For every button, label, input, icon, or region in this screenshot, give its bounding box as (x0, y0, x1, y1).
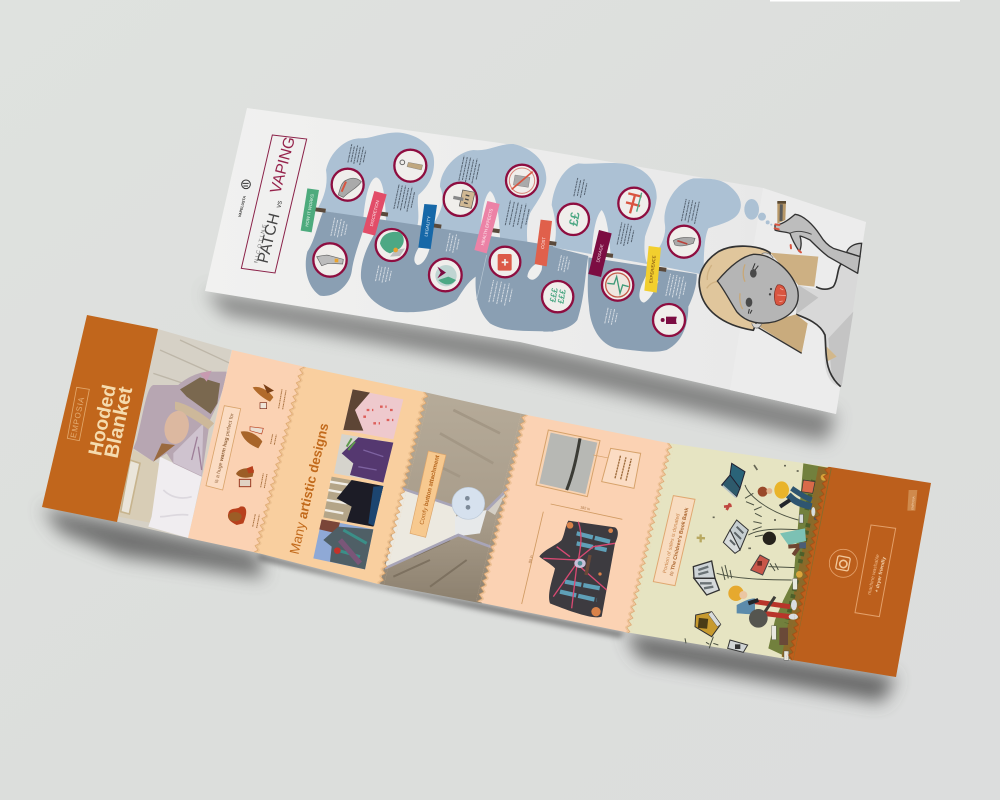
icon: clock with pulse (602, 269, 633, 301)
child with watering can (728, 586, 798, 628)
cloud: experience, light (646, 178, 741, 275)
callout: children's book bank: Portion of sales is donated (662, 513, 682, 574)
teal book (722, 463, 745, 497)
stems and leaves (745, 485, 800, 537)
small brand: EMPOSIA (910, 496, 916, 510)
icon: no smoking sign (506, 165, 538, 197)
callout: children's book bank (653, 496, 695, 586)
plant labels (799, 514, 819, 523)
product: flat blanket (539, 521, 618, 617)
tab: health effects (474, 201, 500, 253)
callout: washing instructions: + dryer friendly (874, 556, 888, 593)
body (796, 265, 858, 387)
panel: photo of child in hood (117, 329, 232, 538)
ground: grass strip (768, 463, 832, 660)
plant near yellow book (685, 637, 718, 648)
icon: patch on wrist (313, 243, 347, 277)
device (777, 201, 786, 224)
logo: Vapelusta (238, 180, 250, 218)
callout: washing instructions: machine washable (867, 554, 881, 595)
photo: purple fabric (334, 434, 393, 483)
illustration: lower garden (685, 555, 798, 660)
panel: children's book bank (625, 443, 830, 660)
tab: dosage (588, 230, 613, 277)
dimension: width: 182 in (580, 505, 590, 511)
icon: hand holding device (668, 226, 700, 258)
lips (774, 285, 786, 305)
icon: person and child (653, 304, 685, 336)
hair (770, 253, 818, 287)
cloud: cost and dosage, light (552, 163, 657, 264)
callout: button attachment: Comfy button attachment (419, 455, 441, 525)
paper sheet (205, 108, 866, 414)
text blocks: experience (666, 199, 699, 299)
text blocks: how it works and discretion (331, 144, 415, 284)
icon: license sign (444, 183, 477, 216)
brand: Emposia: EMPOSIA (69, 396, 86, 439)
tab: experience: EXPERIENCE (648, 255, 657, 283)
open gray book (723, 520, 748, 553)
icon: pound symbols: ££ (566, 211, 583, 227)
title block: NICOTINE (253, 222, 269, 264)
icon: money stack (542, 281, 573, 312)
icon: first aid kit (490, 247, 520, 277)
thought bubbles (744, 199, 772, 226)
title: Hooded Blanket (85, 383, 137, 460)
tab: discretion (363, 191, 388, 236)
reading child (763, 528, 806, 555)
tab: dosage: DOSAGE (595, 244, 604, 263)
cloud: legality and health effects, light (432, 144, 546, 243)
face (717, 254, 798, 323)
panel: uses (188, 350, 305, 553)
child with laptop (758, 480, 815, 516)
cloud: how it works and discretion, light (317, 132, 434, 226)
callout: washing instructions (855, 525, 896, 617)
icon: green shirt patch (376, 229, 408, 261)
yellow book (695, 612, 721, 637)
shadows below flyers (42, 291, 896, 702)
tab: legality: LEGALITY (423, 216, 432, 237)
dimension: width (551, 504, 622, 519)
dimension: height (522, 512, 543, 604)
title block: VAPING (267, 135, 299, 195)
text blocks: cost and dosage (558, 178, 635, 325)
tab: cost: COST (540, 236, 547, 249)
tab: cost (535, 220, 557, 266)
nose (770, 288, 772, 290)
photo: black fabric on stripes (323, 477, 383, 527)
care badge (829, 549, 857, 577)
icon: device (394, 150, 426, 182)
callout: huge warm hug: is a huge warm hug perfect for (214, 413, 236, 484)
icon: dosage chart (618, 188, 650, 219)
tab: how it works (301, 188, 326, 232)
planter and plant labels (772, 578, 797, 660)
red book (751, 555, 769, 575)
details on uses and designs panels (206, 384, 403, 569)
photo: fabric layers (536, 430, 600, 497)
heading: many artistic designs: Many artistic designs (287, 422, 331, 556)
panel: many artistic designs (258, 367, 424, 584)
panel: dimensions (482, 415, 668, 632)
clouds, left section (306, 132, 553, 332)
labels and icons, right section (535, 178, 700, 336)
illustration: upper garden (697, 463, 819, 555)
title: Hooded Blanket: Blanket (101, 385, 137, 460)
icon: hand and patch (332, 169, 364, 201)
labels: four uses (253, 389, 286, 528)
zigzag edge: uses to designs (252, 366, 306, 553)
shoulder and hand (847, 243, 862, 257)
details on dimensions panel (522, 430, 641, 617)
photo: pink floral fabric (343, 389, 403, 439)
callout: children's book bank: to The Children's Book Bank (669, 507, 690, 576)
logo: Vapelusta: VAPELUSTA (238, 195, 247, 218)
stems and leaves (717, 563, 795, 580)
title: Hooded Blanket: Hooded (85, 383, 121, 458)
tab: legality (418, 204, 442, 249)
callout: huge warm hug (206, 406, 241, 490)
zigzag edge: back cover (786, 466, 831, 661)
panel: orange cover (42, 315, 158, 522)
panel: fabric photo (380, 392, 527, 603)
flyer: Emposia hooded blanket (42, 315, 931, 677)
door in background (118, 450, 162, 523)
book bank: callout and ground (653, 463, 832, 660)
large open book (693, 561, 719, 595)
title block (241, 135, 307, 273)
title block: PATCH (255, 212, 283, 265)
cloud: dosage and experience, lower (588, 257, 697, 352)
flyer: nicotine patch vs vaping (205, 108, 866, 414)
butterfly and specks (697, 465, 799, 548)
icon: pound symbols (558, 204, 589, 235)
photo: patterned fabric (313, 519, 373, 569)
back cover details (829, 490, 917, 617)
small gray book (728, 640, 748, 652)
clouds and woman, right section (543, 163, 772, 352)
woman vaping illustration (699, 201, 862, 387)
title block: vs (274, 199, 284, 209)
tab: health effects: HEALTH EFFECTS (480, 208, 494, 246)
icon: money stack: £££ (547, 287, 560, 303)
cloud: cost, lower (543, 245, 588, 332)
dimension: height: 80 in (528, 555, 534, 564)
zigzag edge: dimensions to book bank (624, 443, 674, 634)
tab: discretion: DISCRETION (369, 200, 380, 227)
panel: back cover (792, 467, 931, 677)
cloud: lower dark band (306, 211, 553, 332)
icon: globe (429, 259, 462, 291)
mauve hood (133, 372, 227, 477)
icon row: four uses (228, 384, 274, 525)
tab: how it works: HOW IT WORKS (304, 193, 315, 227)
text blocks: legality and health effects (446, 156, 530, 306)
zigzag edge: fabric to dimensions (476, 414, 528, 603)
zigzag edge: designs to fabric (377, 392, 430, 585)
nails (775, 224, 801, 252)
callout: button attachment (410, 451, 446, 537)
tab: experience (644, 246, 667, 293)
icon: money stack: £££ (555, 288, 568, 304)
title and icons, left section (238, 135, 538, 306)
eyes and brows (750, 269, 757, 278)
white blanket (148, 457, 202, 538)
callout: soft fabric (593, 448, 641, 488)
